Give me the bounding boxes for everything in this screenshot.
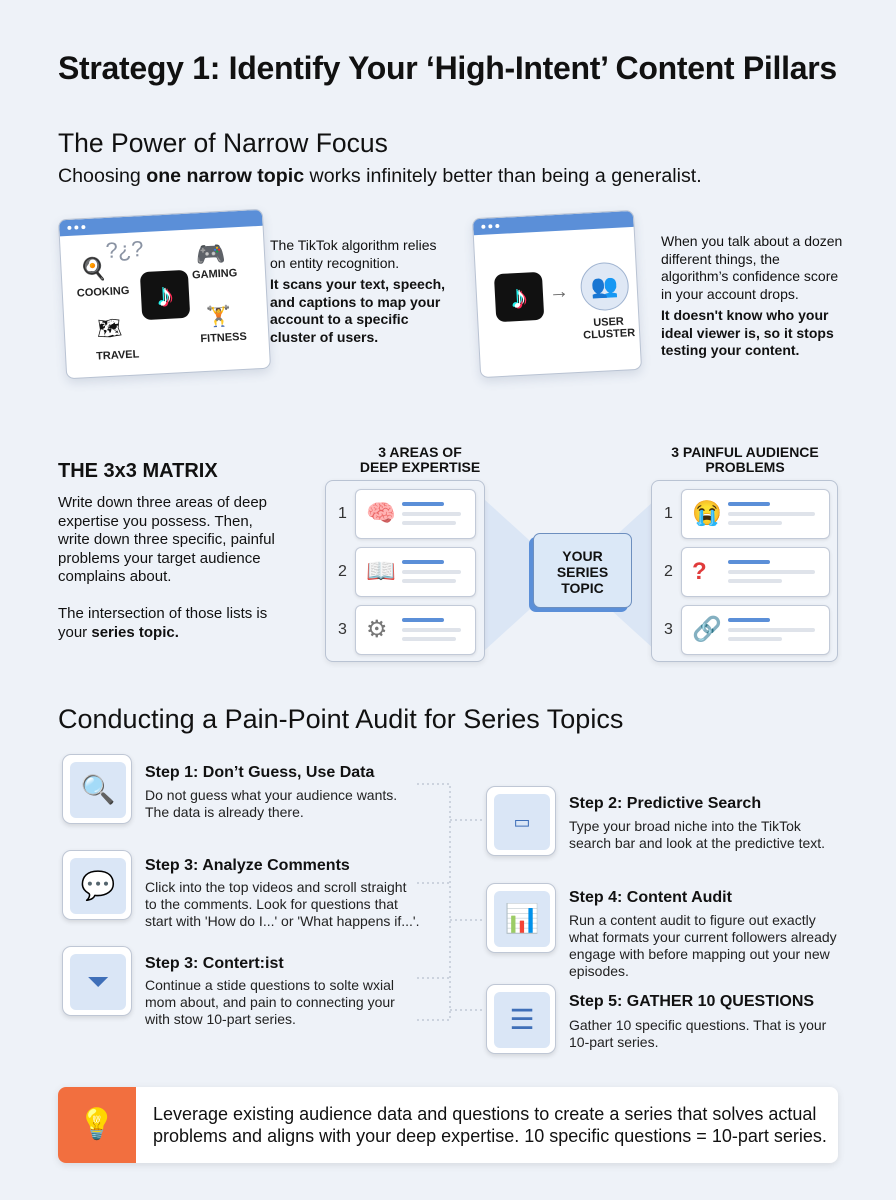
heading: pain-point audit: Conducting a Pain-Point Audit for Series Topics [58,704,623,734]
connector shading [485,500,651,650]
heading: power of narrow focus: The Power of Narrow Focus [58,128,388,158]
panel: problems list: 🔗 [692,616,722,643]
step 5: ☰ [509,1004,535,1035]
step 3 analyze: Step 3: Analyze Comments [145,857,350,874]
panel: expertise list: 🧠 [366,500,396,527]
card: user cluster window: ♪ [510,279,528,315]
panel: problems list: 😭 [692,500,722,527]
step 2: ▭ [513,812,530,832]
text: matrix description [58,494,275,640]
step 5 [484,984,826,1058]
step 1 [60,754,397,828]
text: entity recognition [270,237,445,344]
text: entity recognition: The TikTok algorithm relies on entity recognition. [270,237,437,270]
heading: audience problems: 3 PAINFUL AUDIENCE [671,444,819,460]
text: entity recognition: It scans your text, speech, and captions to map your account to a specific cluster of users. [270,276,445,344]
icon: lightbulb [58,1087,136,1163]
card: topics window: 🎮 [195,241,227,269]
step 5: Step 5: GATHER 10 QUESTIONS [569,993,814,1010]
card: user cluster window: → [548,280,569,303]
heading: 3x3 matrix: THE 3x3 MATRIX [58,460,218,482]
panel: problems list: 2 [664,563,673,580]
step 1: 🔍 [81,774,115,805]
center box: your series topic [533,533,632,608]
panel: expertise list: 📖 [366,558,396,585]
heading: audience problems [671,444,819,475]
card: user cluster window: USER CLUSTER [583,316,635,342]
text: matrix description: The intersection of those lists is your series topic. [58,605,267,640]
banner: key takeaway [58,1087,838,1163]
panel: expertise list: 1 [338,505,347,522]
heading: expertise: 3 AREAS OF [378,444,462,460]
panel: problems list: 3 [664,621,673,638]
panel: expertise list: 2 [338,563,347,580]
heading: expertise [360,444,480,475]
heading: audience problems: PROBLEMS [705,459,785,475]
card: topics window: FITNESS [200,331,247,345]
panel: expertise list: ⚙ [366,616,388,643]
panel: expertise list [325,480,485,662]
icon: lightbulb: 💡 [78,1108,116,1141]
card: topics window: 🗺 [96,317,123,341]
text: confidence score: When you talk about a dozen different things, the algorithm’s confidence score in your account drops. [661,233,842,302]
center box: your series topic: SERIES [557,564,608,580]
step 2: Type your broad niche into the TikTok search bar and look at the predictive text. [569,818,825,851]
step 3 analyze: Click into the top videos and scroll straight to the comments. Look for questions that start with 'How do I...' or 'What happens if...'. [145,879,419,929]
text: matrix description: Write down three areas of deep expertise you possess. Then, write down three specific, painful problems your target audience complains about. [58,494,275,585]
center box: your series topic: TOPIC [561,580,604,596]
step 4: 📊 [505,903,539,934]
card: topics window: ?¿? [105,236,144,263]
step 3 content list: Step 3: Contert:ist [145,955,284,972]
panel: problems list: ? [692,558,707,585]
card: topics window: ♪ [156,277,174,313]
step 4: Run a content audit to figure out exactly what formats your current followers already engage with before mapping out your new episodes. [569,912,837,979]
center box: your series topic: YOUR [562,548,603,564]
heading: expertise: DEEP EXPERTISE [360,459,480,475]
step 2 [484,786,825,860]
dotted connectors [417,784,482,1020]
step 4: Step 4: Content Audit [569,889,732,906]
title: Strategy 1: Identify Your ‘High-Intent’ Content Pillars [58,50,837,86]
step 5: Gather 10 specific questions. That is your 10-part series. [569,1017,826,1050]
card: topics window [58,209,271,379]
step 3 content list: ⏷ [87,966,109,997]
card: topics window: 🏋 [206,306,232,329]
card: topics window: 🍳 [79,256,108,282]
card: topics window: GAMING [192,267,238,282]
card: topics window: TRAVEL [96,348,140,363]
banner: key takeaway: Leverage existing audience data and questions to create a series that solves actual problems and aligns with your deep expertise. 10 specific questions = 10-part series. [153,1104,827,1146]
panel: problems list: 1 [664,505,673,522]
step 3 content list: Continue a stide questions to solte wxial mom about, and pain to connecting your with stow 10-part series. [145,977,395,1027]
step 2: Step 2: Predictive Search [569,795,761,812]
step 3 analyze [60,850,419,929]
card: topics window: COOKING [77,285,130,300]
step 1: Step 1: Don’t Guess, Use Data [145,764,374,781]
panel: expertise list: 3 [338,621,347,638]
panel: problems list [651,480,838,662]
text: confidence score: It doesn't know who your ideal viewer is, so it stops testing your content. [661,307,834,358]
step 3 analyze: 💬 [81,870,115,901]
step 1: Do not guess what your audience wants. The data is already there. [145,787,397,820]
text: confidence score [661,233,842,358]
subtitle: Choosing one narrow topic works infinitely better than being a generalist. [58,165,702,187]
step 3 content list [60,946,395,1027]
card: user cluster window: 👥 [590,273,619,299]
card: user cluster window [472,210,642,378]
step 4 [484,883,837,979]
